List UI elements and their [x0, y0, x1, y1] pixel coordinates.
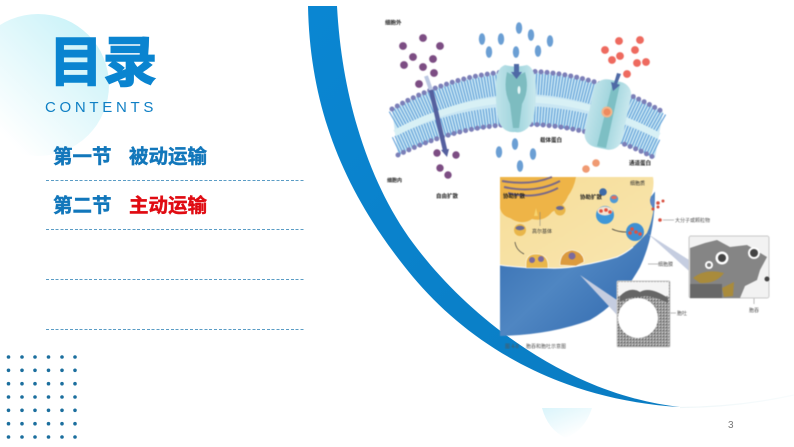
- membrane labels: 自由扩散: [436, 192, 459, 200]
- cell labels: 胞吞和胞吐示意图: [526, 343, 566, 350]
- cell labels: 细胞质: [630, 180, 645, 187]
- title: 目录: [49, 33, 157, 93]
- carrier protein molecules: [479, 22, 553, 172]
- zoom wedges: [580, 234, 689, 315]
- contents subtitle: CONTENTS: [45, 99, 157, 116]
- menu item: section one: 被动运输: [129, 146, 207, 168]
- blue extracellular area: [500, 192, 655, 336]
- vesicles: [514, 188, 654, 268]
- membrane labels: 细胞外: [385, 18, 402, 26]
- page number: 3: [728, 420, 734, 431]
- divider: [46, 329, 305, 330]
- divider: [46, 279, 305, 280]
- membrane labels: 细胞内: [387, 177, 402, 184]
- menu item: section one: 第一节: [53, 146, 112, 168]
- large molecules: [652, 200, 664, 222]
- carrier protein: [496, 64, 536, 132]
- cell labels: 协助扩散: [503, 192, 526, 200]
- menu item: section two: [53, 194, 208, 217]
- decorative circle behind title: [0, 14, 109, 156]
- membrane labels: 通道蛋白: [629, 159, 651, 167]
- cell labels: 协助扩散: [580, 193, 603, 201]
- leader lines: [540, 212, 754, 313]
- channel protein molecules: [582, 36, 650, 186]
- channel protein: [582, 73, 634, 152]
- micrograph: endocytosis: [689, 236, 770, 298]
- dot grid: [7, 355, 77, 439]
- divider: [46, 180, 305, 181]
- cell labels: 胞吞: [749, 307, 759, 314]
- cell labels: 细胞膜: [658, 261, 673, 268]
- free diffusion arrow: [426, 76, 449, 157]
- endocytosis and exocytosis diagram: [500, 177, 770, 350]
- cell labels: 胞吐: [677, 310, 687, 317]
- decorative fan at bottom: [542, 408, 592, 438]
- cell labels: 大分子或颗粒物: [675, 217, 710, 224]
- phospholipid bilayer: [392, 71, 663, 158]
- yellow cytoplasm: [500, 177, 654, 268]
- golgi body: [500, 177, 576, 222]
- cell labels: 高尔基体: [532, 228, 552, 235]
- divider: [46, 229, 305, 230]
- cell labels: 图 4-8: [505, 344, 519, 350]
- cell labels: [503, 180, 759, 350]
- menu item: section two: 第二节: [53, 195, 112, 217]
- micrograph: exocytosis: [617, 281, 670, 347]
- membrane transport diagram: [385, 18, 663, 200]
- menu item: section two: 主动运输: [129, 195, 207, 217]
- blue arc: [308, 6, 794, 408]
- white membrane edge: [500, 247, 633, 268]
- free diffusion molecules: [399, 34, 460, 179]
- menu item: section one: [53, 146, 208, 168]
- curved arrows: [515, 229, 626, 254]
- membrane labels: [385, 18, 651, 200]
- membrane labels: 载体蛋白: [540, 136, 562, 144]
